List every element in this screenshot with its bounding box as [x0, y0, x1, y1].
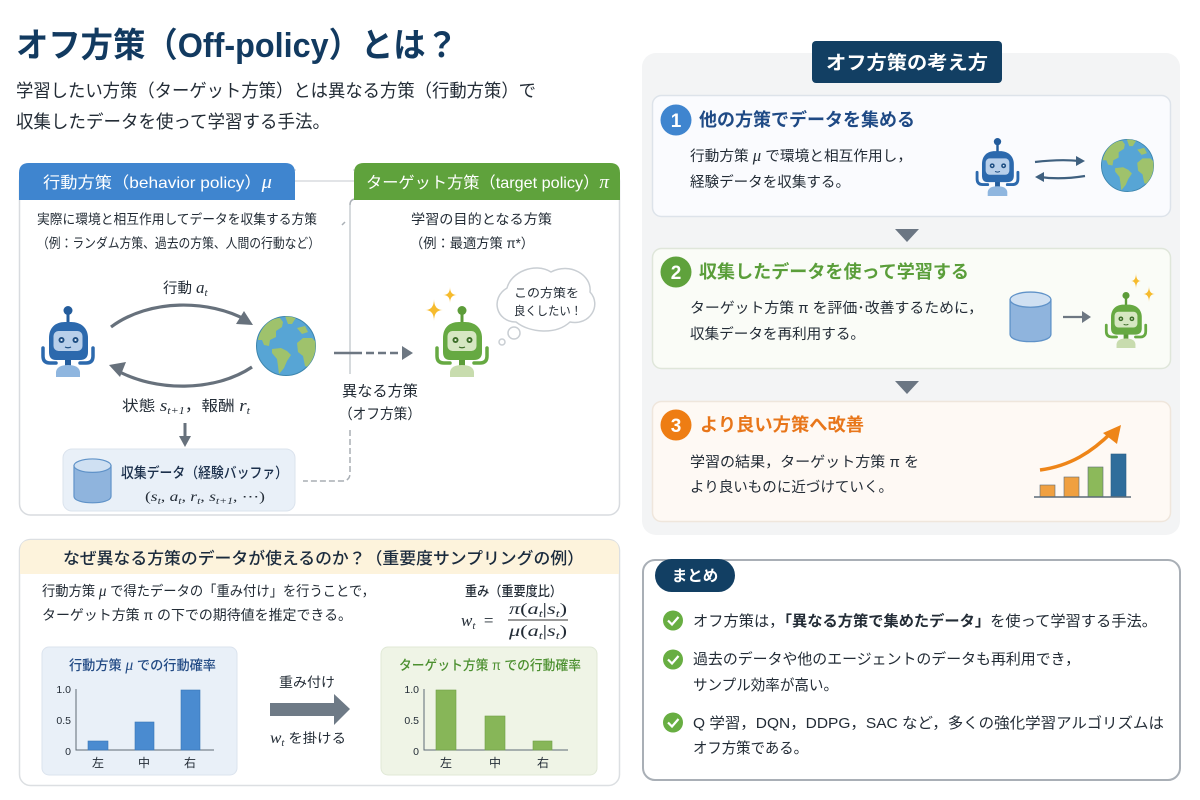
bar chart: behavior policy: 1.0 — [56, 684, 71, 696]
bar chart: target policy: 1.0 — [404, 684, 419, 696]
badge: summary: まとめ — [672, 567, 718, 585]
label: state and reward: r — [239, 396, 247, 415]
weight formula: t — [539, 631, 543, 642]
title: オフ方策（Off-policy）とは？ — [16, 27, 458, 65]
panel: summary — [643, 559, 1180, 780]
header: behavior policy: 行動方策（behavior policy） μ — [43, 172, 272, 193]
behavior description: 実際に環境と相互作用してデータを収集する方策 — [37, 211, 317, 227]
icon: sparkles — [425, 287, 457, 321]
badge: summary — [655, 559, 735, 592]
weight formula: t — [472, 620, 476, 632]
label: action: t — [205, 287, 209, 299]
icon: blue robot small — [977, 138, 1018, 196]
weight formula: π(a — [509, 601, 536, 618]
step 3 card — [652, 402, 1170, 522]
label: action: 行動 a — [163, 278, 205, 297]
weight formula: | — [543, 601, 547, 618]
weight formula: = — [475, 611, 494, 630]
weight formula: μ(a — [509, 623, 536, 640]
bar chart: behavior policy — [42, 647, 237, 775]
explanation: 行動方策 μ で得たデータの「重み付け」を行うことで， — [42, 583, 375, 600]
arrow: off-policy transfer — [334, 346, 413, 360]
icon: growth chart — [1034, 425, 1131, 497]
summary item 3 — [663, 712, 1164, 757]
thought bubble: 良くしたい！ — [514, 303, 582, 318]
arrow: data to robot — [1063, 311, 1091, 323]
label: state and reward: 状態 s — [122, 396, 166, 415]
weighting arrow: 重み付け — [279, 675, 335, 690]
step 1 card: 他の方策でデータを集める — [699, 109, 915, 130]
summary item 2 — [663, 650, 1080, 694]
arrow: environment to agent — [109, 362, 252, 386]
label: state and reward: t — [247, 406, 251, 417]
experience buffer: t+1 — [216, 497, 233, 507]
bar chart: behavior policy: 0.5 — [56, 715, 71, 727]
heading: why — [20, 540, 619, 574]
intro text: 収集したデータを使って学習する手法。 — [16, 112, 330, 132]
weighting arrow: t — [281, 738, 285, 749]
summary item 3: オフ方策である。 — [693, 740, 808, 757]
explanation: ターゲット方策 π の下での期待値を推定できる。 — [42, 607, 352, 623]
icon: blue robot — [43, 306, 93, 377]
badge: panel heading: オフ方策の考え方 — [826, 51, 988, 74]
header: behavior policy — [19, 163, 295, 200]
icons: exchange arrows — [1035, 156, 1085, 182]
label: off-policy — [339, 383, 421, 423]
weight formula: s — [547, 623, 556, 640]
step 3 card: 3 — [671, 416, 681, 437]
icon: sparkles small — [1131, 273, 1155, 302]
panel: importance sampling — [20, 540, 620, 786]
bar chart: behavior policy: 右 — [184, 755, 196, 770]
weight formula: | — [543, 623, 547, 640]
experience buffer — [63, 449, 295, 511]
weight formula — [461, 584, 568, 642]
bar chart: target policy: 右 — [537, 755, 549, 770]
icon: database — [74, 459, 111, 503]
header: target policy: ターゲット方策（target policy）π — [366, 172, 609, 193]
heading: why: なぜ異なる方策のデータが使えるのか？（重要度サンプリングの例） — [63, 548, 584, 568]
step 2 card: ターゲット方策 π を評価･改善するために， — [690, 300, 983, 317]
experience buffer: , — [161, 490, 170, 505]
bar chart: target policy: ターゲット方策 π での行動確率 — [399, 657, 581, 673]
step 1 card — [652, 96, 1170, 216]
experience buffer: s — [209, 490, 217, 505]
badge: panel heading — [812, 41, 1002, 83]
intro text — [16, 81, 536, 132]
bar chart: behavior policy: 左 — [92, 755, 104, 770]
step 1 card: 経験データを収集する。 — [690, 173, 850, 191]
intro text: 学習したい方策（ターゲット方策）とは異なる方策（行動方策）で — [16, 81, 536, 101]
panel: how off-policy works — [642, 41, 1180, 535]
target description — [410, 211, 553, 251]
experience buffer: a — [170, 490, 178, 505]
weight formula: t — [556, 631, 560, 642]
step 2 card: 収集したデータを使って学習する — [699, 261, 969, 282]
panel: behavior and target policy — [19, 163, 620, 515]
experience buffer: , — [200, 490, 209, 505]
weighting arrow: w — [270, 730, 282, 747]
arrow: step 2 to 3 — [895, 381, 919, 394]
experience buffer: , ⋯) — [233, 490, 265, 505]
step 1 card: 1 — [671, 111, 682, 132]
summary item 2: サンプル効率が高い。 — [693, 677, 838, 694]
weight formula: t — [556, 609, 560, 620]
icon: green robot — [437, 306, 487, 377]
step 3 card: より良いものに近づけていく。 — [690, 479, 893, 496]
bar chart: behavior policy: 0 — [65, 746, 71, 758]
arrow: down to buffer — [179, 423, 191, 447]
bar chart: target policy: 0.5 — [404, 715, 419, 727]
icon: database small — [1010, 292, 1051, 342]
step 3 card: より良い方策へ改善 — [700, 414, 864, 435]
bar chart: target policy — [381, 647, 597, 775]
behavior description — [37, 211, 320, 251]
thought bubble — [497, 268, 595, 345]
bar chart: target policy: 中 — [489, 755, 501, 770]
label: state and reward: t+1 — [167, 406, 185, 417]
target description: （例：最適方策 π*） — [410, 235, 534, 251]
bar chart: target policy: 左 — [440, 755, 452, 770]
summary item 1: オフ方策は，「異なる方策で集めたデータ」を使って学習する手法。 — [693, 612, 1157, 630]
target description: 学習の目的となる方策 — [411, 211, 553, 227]
summary item 3: Q 学習，DQN，DDPG，SAC など，多くの強化学習アルゴリズムは — [693, 714, 1164, 732]
weighting arrow — [270, 675, 350, 749]
step 1 card: 行動方策 μ で環境と相互作用し， — [690, 146, 912, 165]
experience buffer: t — [178, 497, 182, 507]
experience buffer: (s — [145, 490, 156, 505]
weight formula: s — [547, 601, 556, 618]
explanation — [42, 583, 375, 623]
icon: globe small — [1101, 139, 1156, 192]
weight formula: ) — [560, 601, 567, 618]
weight formula: 重み（重要度比） — [465, 584, 562, 599]
step 2 card — [652, 248, 1170, 368]
step 2 card: 2 — [671, 263, 681, 284]
weight formula: ) — [560, 623, 567, 640]
label: state and reward: ，報酬 — [185, 398, 239, 415]
label: off-policy: 異なる方策 — [342, 383, 418, 400]
header: target policy — [354, 163, 620, 200]
weight formula: t — [539, 609, 543, 620]
experience buffer: 収集データ（経験バッファ） — [121, 464, 288, 482]
experience buffer: t — [158, 497, 161, 507]
behavior description: （例：ランダム方策、過去の方策、人間の行動など） — [37, 235, 320, 251]
experience buffer: r — [190, 490, 198, 505]
label: off-policy: （オフ方策） — [339, 406, 421, 423]
step 3 card: 学習の結果，ターゲット方策 π を — [690, 454, 919, 471]
experience buffer: t — [197, 497, 201, 507]
arrow: action to environment — [111, 305, 253, 327]
bar chart: behavior policy: 中 — [138, 755, 150, 770]
thought bubble: この方策を — [514, 285, 579, 300]
icon: green robot small — [1106, 292, 1146, 348]
icon: globe — [256, 316, 318, 376]
arrow: step 1 to 2 — [895, 229, 919, 242]
weighting arrow: を掛ける — [284, 731, 346, 746]
summary item 2: 過去のデータや他のエージェントのデータも再利用でき， — [693, 650, 1080, 668]
experience buffer: , — [182, 490, 190, 505]
bar chart: target policy: 0 — [413, 746, 419, 758]
step 2 card: 収集データを再利用する。 — [690, 325, 865, 343]
bar chart: behavior policy: 行動方策 μ での行動確率 — [69, 657, 216, 674]
weight formula: w — [461, 611, 473, 630]
